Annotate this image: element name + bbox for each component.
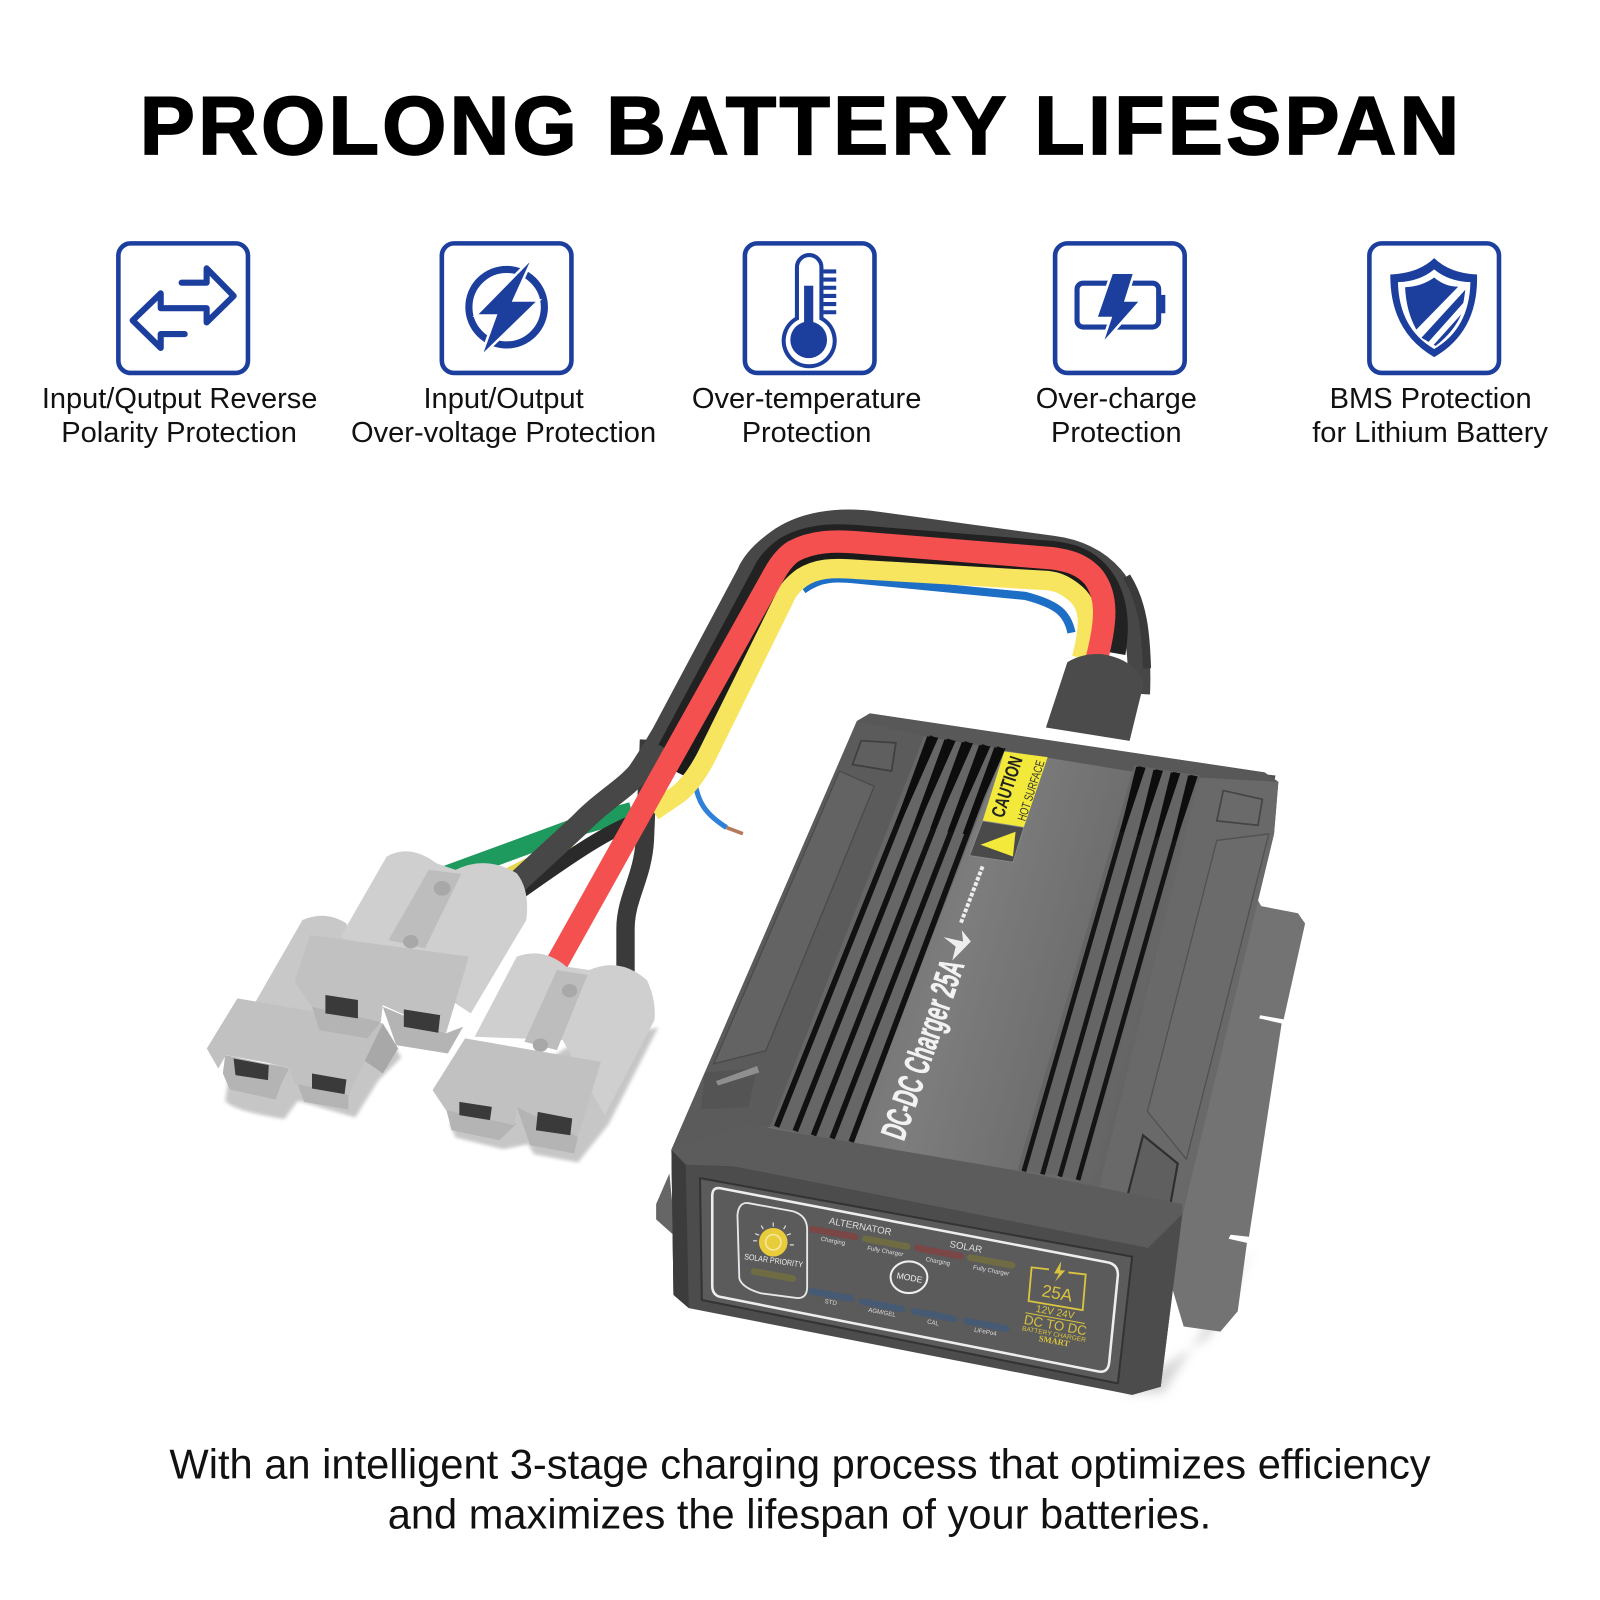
product name: DC-DC Charger 25A: [873, 954, 972, 1144]
feature: BMS protection: [1312, 243, 1549, 449]
caution label: CAUTION: [988, 754, 1028, 820]
panel labels: ALTERNATOR: [828, 1216, 892, 1238]
charger shadow: [1122, 1247, 1255, 1393]
feature: over-temperature protection: [692, 243, 921, 449]
icon: thermometer: [745, 243, 874, 373]
solar priority button: [737, 1203, 807, 1298]
charger top face: [671, 713, 1278, 1248]
feature: over-charge protection: [1036, 243, 1197, 449]
solar priority button: SOLAR PRIORITY: [744, 1252, 804, 1269]
label: for Lithium Battery: [1312, 417, 1549, 449]
icon: lightning in circle: [442, 243, 571, 373]
panel labels: CAL: [926, 1318, 940, 1328]
panel labels: STD: [824, 1298, 838, 1307]
panel labels: Charging: [820, 1236, 846, 1247]
label: Protection: [742, 417, 871, 449]
connector: upper: [295, 851, 527, 1053]
panel labels: AGM/GEL: [868, 1307, 897, 1319]
label: [1036, 383, 1197, 449]
25A logo: 12V 24V: [1035, 1304, 1075, 1322]
right vents: [1017, 765, 1199, 1180]
top end band: [857, 713, 1278, 795]
panel labels: SOLAR: [949, 1239, 983, 1256]
feature: over-voltage protection: [351, 243, 656, 449]
panel labels: Charging: [925, 1256, 951, 1267]
connector: lower-left: [207, 916, 401, 1119]
right side band: [1095, 778, 1278, 1216]
mode button: [891, 1261, 927, 1293]
25A logo: BATTERY CHARGER: [1021, 1325, 1087, 1344]
cable boot: [1046, 654, 1143, 741]
indicator LEDs: [754, 1229, 1012, 1329]
label: Over-voltage Protection: [351, 417, 656, 449]
bottom caption: With an intelligent 3-stage charging process that optimizes efficiency: [169, 1441, 1431, 1488]
25A logo: SMART: [1038, 1333, 1070, 1349]
label: [42, 383, 317, 449]
panel labels: Fully Charger: [867, 1245, 904, 1258]
icon: shield: [1369, 243, 1499, 373]
mode button: MODE: [896, 1270, 923, 1285]
dashes and bolt: [944, 866, 983, 961]
mounting flanges: [656, 878, 1305, 1332]
25A logo: 25A: [1040, 1280, 1075, 1306]
panel labels: LiFePo4: [973, 1327, 998, 1338]
bottom caption: [169, 1441, 1431, 1538]
label: [1312, 383, 1549, 449]
25A logo: DC TO DC: [1023, 1312, 1088, 1338]
label: BMS Protection: [1330, 383, 1532, 415]
icon: battery with bolt: [1055, 243, 1185, 373]
caution label: HOT SURFACE: [1015, 759, 1047, 823]
panel labels: Fully Charger: [972, 1264, 1010, 1278]
caution label: [970, 752, 1048, 862]
icon: reverse arrows: [118, 243, 248, 373]
label: Protection: [1051, 417, 1182, 449]
bottom caption: and maximizes the lifespan of your batteries.: [388, 1491, 1211, 1538]
feature: reverse polarity protection: [42, 243, 317, 449]
product: DC-DC charger with cables: [207, 521, 1305, 1395]
label: Over-charge: [1036, 383, 1197, 415]
label: Input/Output: [423, 383, 584, 415]
left side band: [671, 721, 926, 1150]
label: [692, 383, 921, 449]
panel labels: [820, 1216, 1010, 1338]
label: Input/Qutput Reverse: [42, 383, 317, 415]
charger body underlay: [671, 727, 1276, 1395]
title: PROLONG BATTERY LIFESPAN: [140, 79, 1459, 172]
label: Polarity Protection: [61, 417, 297, 449]
label: Over-temperature: [692, 383, 921, 415]
25A logo: [1021, 1261, 1088, 1349]
left vents: [770, 736, 1006, 1144]
connector: right: [433, 953, 658, 1163]
label: [351, 383, 656, 449]
corner recesses: [852, 741, 896, 771]
white outline: [712, 1188, 1118, 1372]
cables: [439, 521, 1147, 1005]
charger front face: [671, 1124, 1182, 1395]
